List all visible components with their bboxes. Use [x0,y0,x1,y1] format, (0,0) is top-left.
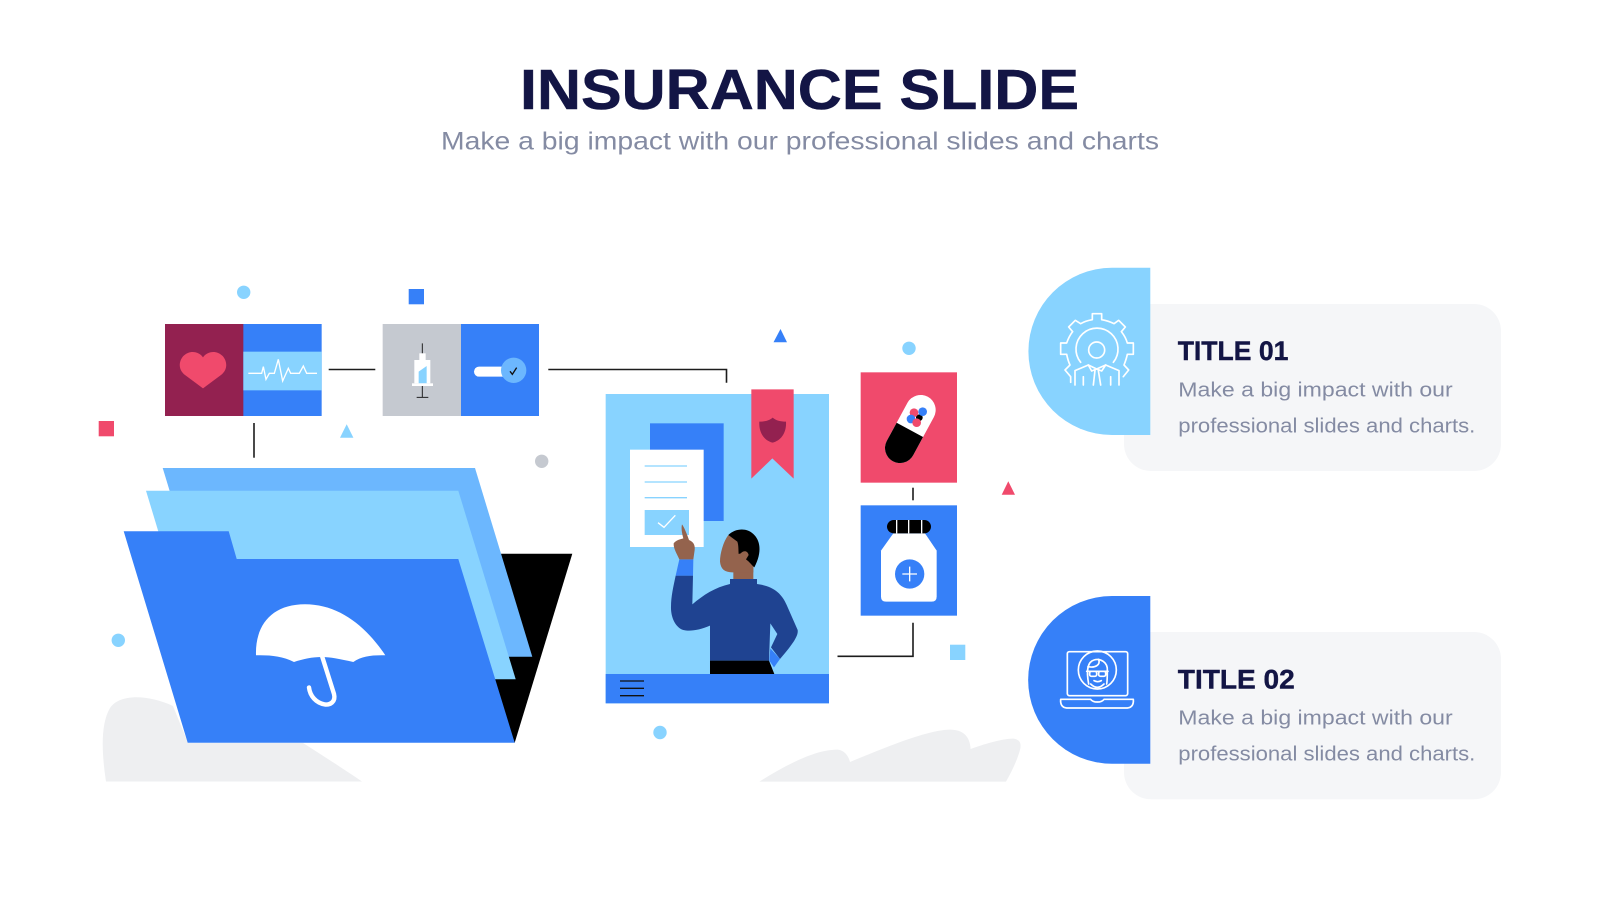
half circle badge 02 [1028,596,1150,764]
body text 01 [1178,380,1475,438]
icon: umbrella [256,604,385,705]
bottom navigation bar [606,674,829,703]
folder with umbrella [124,468,572,743]
syringe and toggle tile [383,324,539,416]
heading 01: TITLE 01 [1178,336,1288,366]
half circle badge 01 [1028,268,1150,435]
icon: bottle [881,520,937,602]
body text 01: professional slides and charts. [1178,416,1475,438]
background cloud left [103,697,362,782]
panel: title 02 [1028,596,1501,799]
connector lines [254,370,913,656]
body text 01: Make a big impact with our [1178,380,1453,402]
panel: title 01 [1028,268,1501,471]
icon: laptop with face [1061,651,1133,708]
bookmark with shield [751,389,794,479]
phone screen panel with person [606,389,829,703]
body text 02: professional slides and charts. [1178,743,1475,765]
icon: toggle with check [474,358,526,383]
heart and pulse tile [165,324,322,416]
subtitle: Make a big impact with our professional slides and charts [441,128,1159,156]
icon: capsule [880,390,941,468]
icon: gear with person [1061,314,1133,385]
icon: heart [180,352,226,388]
medicine bottle tile [861,505,957,616]
person pointing at document [671,524,798,674]
icon: syringe [412,343,433,397]
document with check [630,423,724,547]
heading 02: TITLE 02 [1178,665,1295,695]
body text 02: Make a big impact with our [1178,707,1453,729]
icon: pulse line [248,359,317,381]
background cloud right [759,730,1021,782]
title: INSURANCE SLIDE [520,58,1079,122]
body text 02 [1178,707,1475,765]
decorative confetti shapes [99,286,1015,739]
pill tile [861,372,957,483]
